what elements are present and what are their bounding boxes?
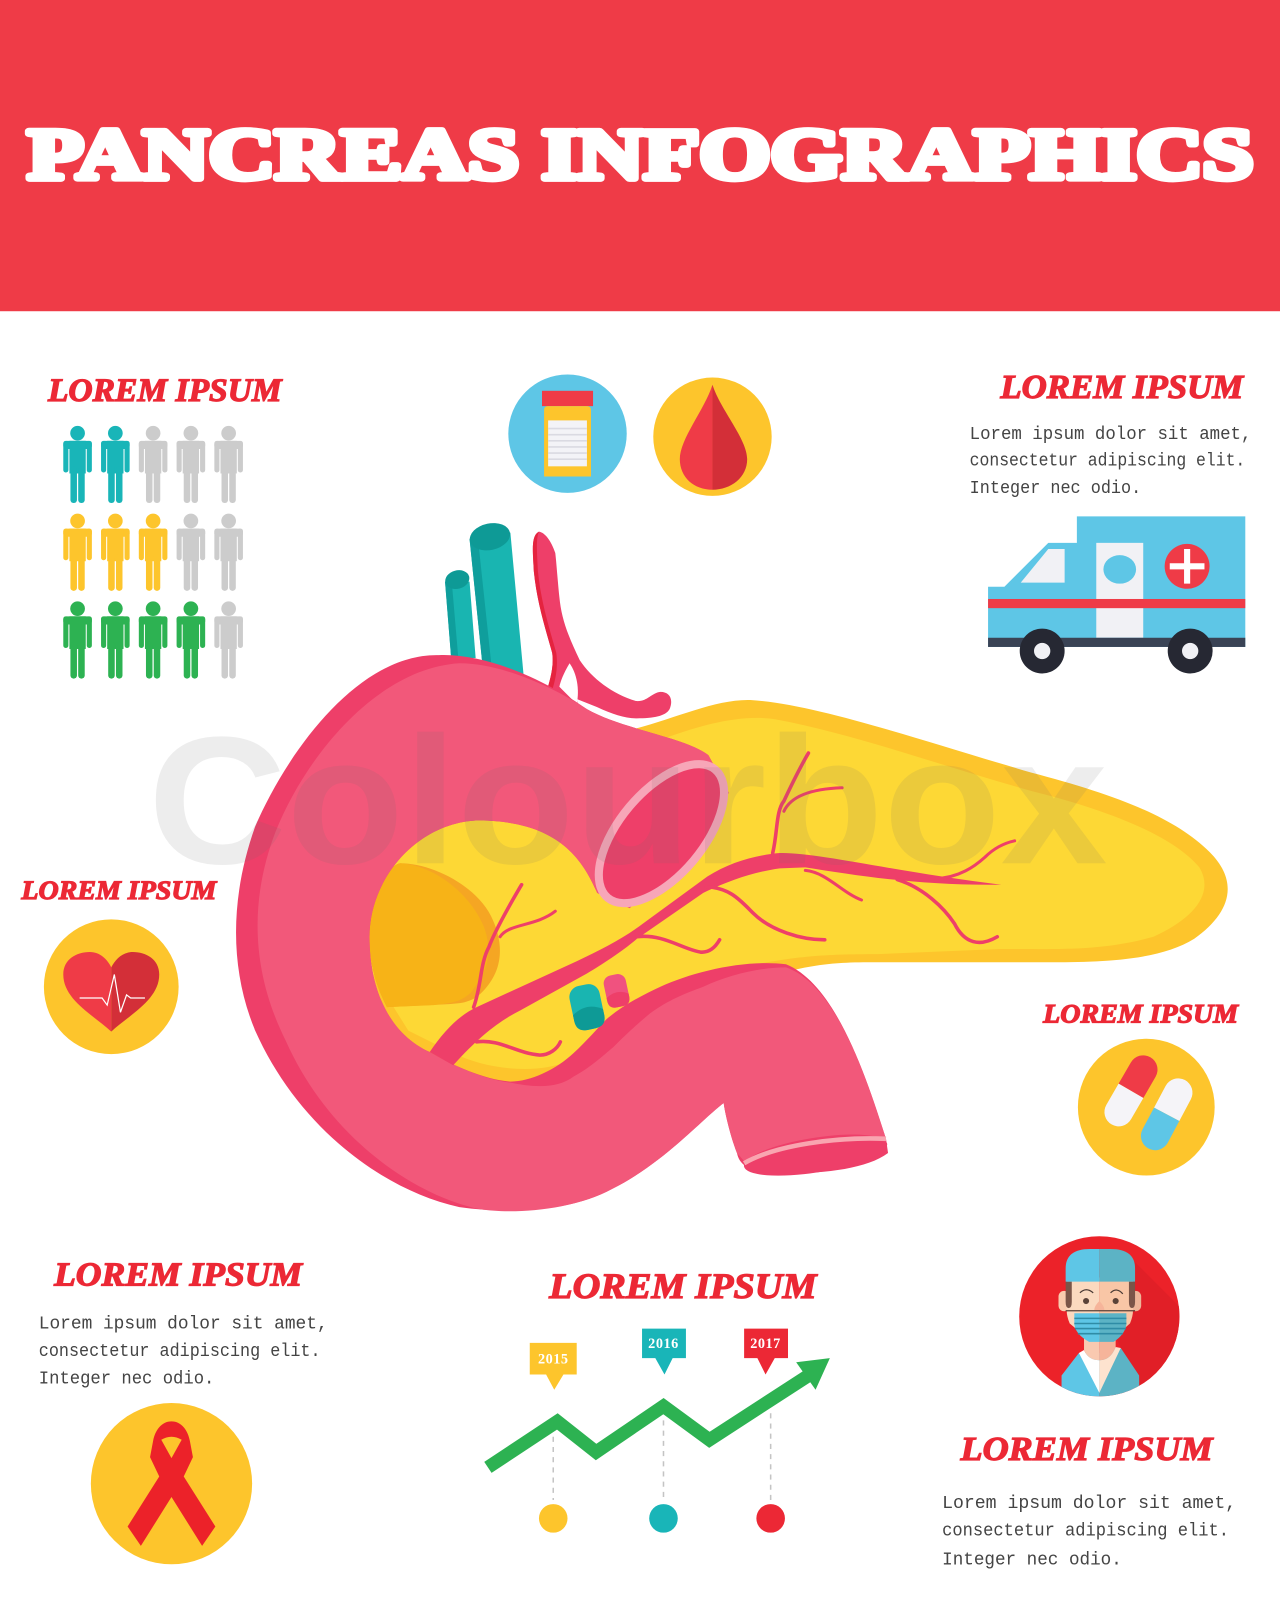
panel: people statistics (47, 373, 283, 679)
timeline dots (539, 1504, 785, 1533)
panel: awareness ribbon (39, 1257, 328, 1564)
body text: ambulance (970, 424, 1251, 499)
pictogram row: yellow (63, 514, 243, 591)
panel: heart (20, 875, 218, 1054)
heading: ribbon: LOREM IPSUM (53, 1257, 303, 1294)
body text: ribbon: consectetur adipiscing elit. (39, 1341, 321, 1362)
body text: ambulance: Lorem ipsum dolor sit amet, (970, 424, 1251, 445)
body text: ribbon: Lorem ipsum dolor sit amet, (39, 1314, 328, 1335)
icon: doctor (1019, 1236, 1184, 1398)
marker: 2015 (530, 1343, 577, 1390)
body text: ambulance: consectetur adipiscing elit. (970, 450, 1245, 471)
body text: doctor (942, 1493, 1236, 1570)
pancreas body (357, 700, 1228, 1097)
vessels: small teal tube (443, 568, 476, 658)
body text: ribbon (39, 1314, 328, 1390)
marker: 2017 (744, 1329, 788, 1374)
marker: 2016: 2016 (648, 1336, 679, 1352)
duodenum outer (236, 655, 888, 1211)
pancreas inner highlight (357, 718, 1204, 1069)
panel: timeline chart (488, 1266, 830, 1533)
icon: heart pulse (44, 919, 179, 1054)
duct branches (474, 753, 1015, 1055)
title: PANCREAS INFOGRAPHICS (28, 114, 1253, 195)
marker: 2017: 2017 (750, 1336, 781, 1352)
pancreas illustration (236, 520, 1228, 1211)
icon: medicine jar (508, 374, 627, 493)
heading: medication: LOREM IPSUM (1042, 998, 1240, 1028)
heading: heart: LOREM IPSUM (20, 875, 218, 905)
icon: ambulance (988, 516, 1245, 673)
panel: doctor text (942, 1431, 1236, 1570)
heading: doctor: LOREM IPSUM (959, 1431, 1214, 1468)
icon: ribbon (91, 1403, 252, 1564)
panel: medication (1042, 998, 1240, 1176)
heading: timeline: LOREM IPSUM (548, 1266, 818, 1306)
heading: people: LOREM IPSUM (47, 373, 283, 409)
trend arrow (488, 1358, 830, 1467)
icon: blood drop (653, 378, 772, 496)
pills in duct (567, 973, 631, 1032)
marker: 2016 (642, 1329, 686, 1374)
main pancreatic duct (430, 853, 1001, 1065)
vessel: artery (533, 532, 671, 718)
panel: ambulance text (970, 369, 1251, 499)
pictogram row: green (63, 601, 243, 679)
marker: 2015: 2015 (538, 1351, 569, 1367)
body text: ribbon: Integer nec odio. (39, 1369, 214, 1390)
dashed guides (553, 1413, 771, 1500)
watermark: Colourbox (148, 700, 1107, 902)
body text: doctor: consectetur adipiscing elit. (942, 1521, 1229, 1542)
body text: doctor: Lorem ipsum dolor sit amet, (942, 1493, 1236, 1514)
body text: doctor: Integer nec odio. (942, 1549, 1122, 1570)
pictogram row: teal (63, 426, 243, 503)
body text: ambulance: Integer nec odio. (970, 478, 1141, 499)
heading: ambulance: LOREM IPSUM (999, 369, 1244, 406)
vessels: large teal tube (467, 520, 524, 676)
duodenum opening (576, 743, 747, 925)
pancreatic head (370, 863, 500, 1007)
icon: capsules (1078, 1039, 1215, 1176)
tube end (741, 1127, 890, 1184)
duodenum light surface (258, 663, 886, 1211)
header banner (0, 0, 1280, 311)
